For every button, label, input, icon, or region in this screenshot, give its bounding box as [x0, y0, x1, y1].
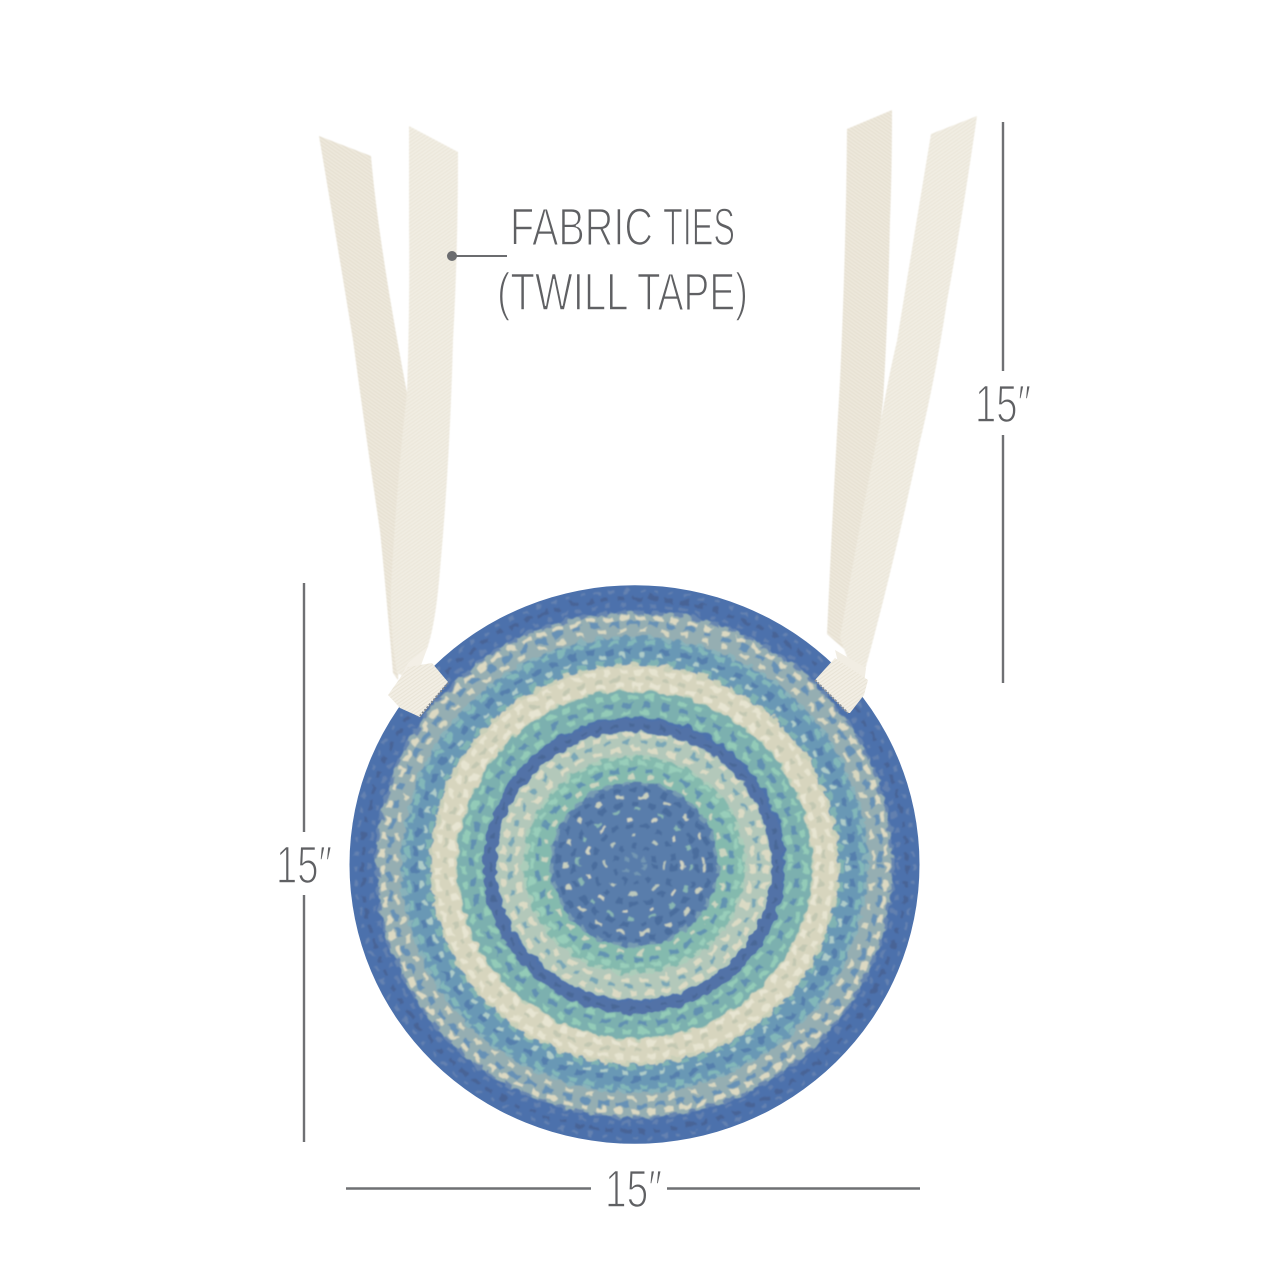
inner dark blue ring — [490, 725, 778, 1008]
callout label: fabric ties (twill tape): (TWILL — [497, 263, 627, 322]
teal blue band — [416, 651, 852, 1078]
left fabric tie — [319, 126, 458, 680]
mottled cream and blue band — [390, 624, 880, 1105]
green band — [470, 704, 798, 1025]
outer blue border — [350, 585, 920, 1144]
dimension: tie length 15 inches: 15″ — [975, 375, 1031, 434]
callout: fabric ties leader — [447, 251, 507, 261]
callout label: fabric ties (twill tape): TAPE) — [637, 263, 748, 322]
dimension: pad width 15 inches: 15″ — [605, 1160, 662, 1219]
dimension: pad height 15 inches: 15″ — [276, 836, 332, 895]
left tie knot — [388, 646, 448, 717]
callout label: fabric ties (twill tape): TIES — [663, 198, 735, 257]
right tie knot — [815, 650, 868, 713]
right fabric tie — [827, 110, 977, 670]
inner cream and green band — [510, 743, 758, 986]
cream band — [444, 678, 824, 1051]
center blue — [592, 823, 676, 906]
callout label: fabric ties (twill tape) — [497, 198, 748, 322]
braided round chair pad — [350, 585, 920, 1144]
callout label: fabric ties (twill tape): FABRIC — [510, 198, 653, 257]
